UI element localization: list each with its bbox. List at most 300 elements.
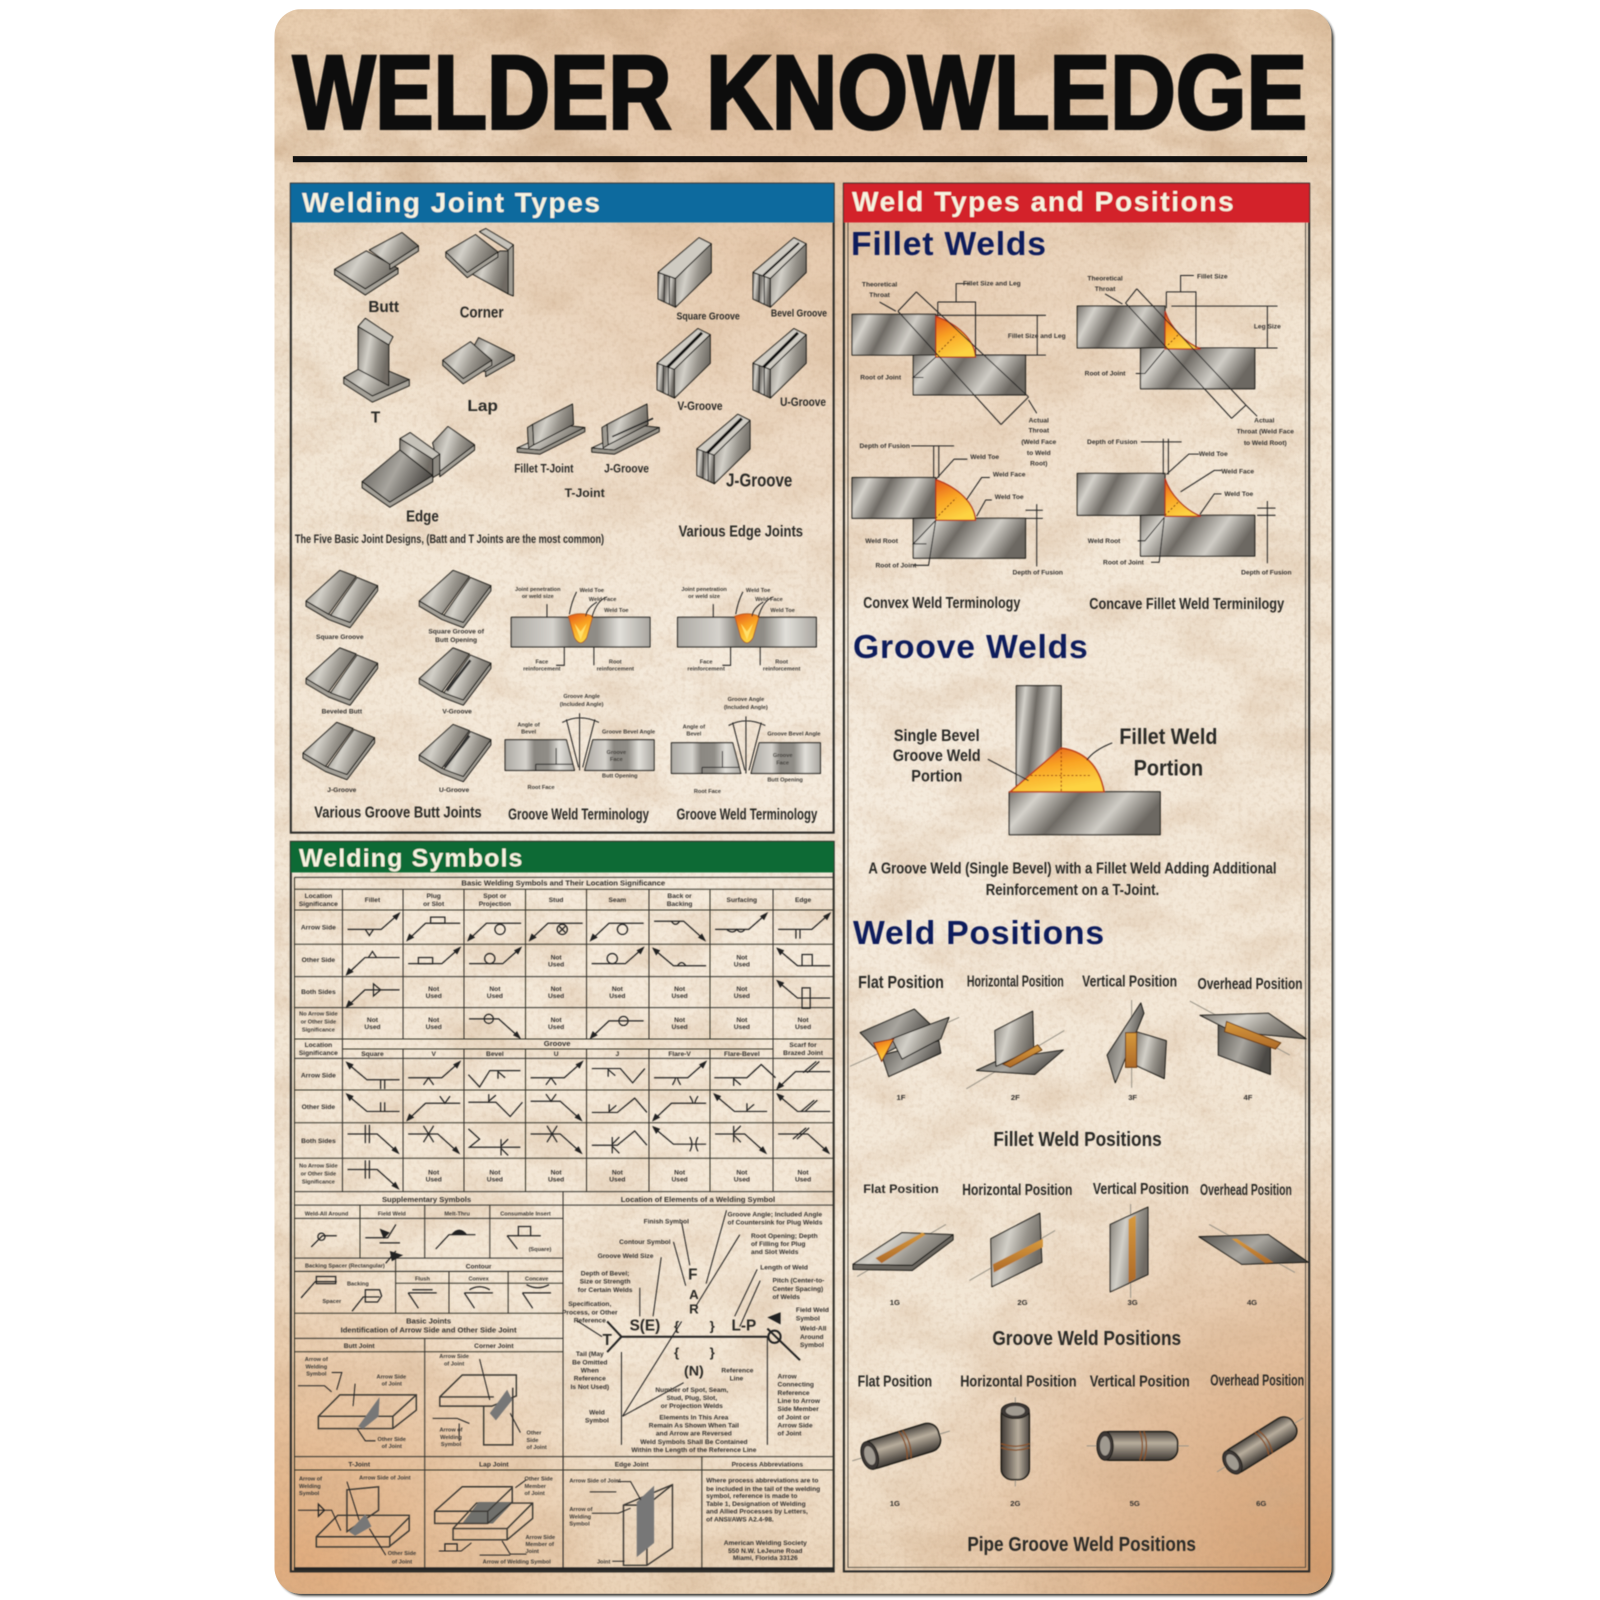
symbol elements: } (710, 1319, 715, 1334)
diagram: concave terminology: Depth of Fusion (1087, 439, 1137, 446)
symbols: no arrow side row: Not (551, 1017, 562, 1024)
icon: bevel groove edge joint: Bevel Groove (771, 308, 827, 319)
symbols: groove no arrow side row: Not (674, 1170, 686, 1177)
icon: 6G pipe overhead: 6G (1256, 1499, 1266, 1508)
icon: j-groove butt (303, 722, 374, 794)
text block: groove weld note (868, 860, 1277, 899)
text block: groove weld note: A Groove Weld (Single Bevel) with a Fillet Weld Adding Additional (868, 860, 1277, 877)
diagram: groove weld terminology left: or weld size (522, 594, 554, 600)
symbols: both sides row (346, 980, 830, 1008)
fillet position labels: Flat Position (858, 972, 944, 992)
table: supplementary symbols: Concave (525, 1277, 548, 1283)
symbols: both sides row: Not (674, 986, 686, 993)
diagram: groove weld terminology right: Joint penetration (681, 587, 727, 593)
diagram: concave fillet throat: to Weld Root) (1244, 440, 1287, 447)
symbol: consumable insert: (Square) (529, 1247, 551, 1253)
symbols: groove no arrow side row: Used (609, 1177, 625, 1184)
element labels: for Certain Welds (578, 1287, 633, 1294)
diagram: concave terminology: Root of Joint (1103, 559, 1145, 566)
icon: 3G groove vertical: 3G (1128, 1298, 1138, 1307)
diagram: butt joint identification: Other Side (378, 1437, 406, 1443)
icon: 3F fillet vertical: 3F (1128, 1093, 1137, 1102)
icon: j-groove butt: J-Groove (327, 787, 357, 794)
label: fillet weld portion: Portion (1134, 756, 1203, 781)
diagram: t-joint identification: Symbol (299, 1491, 320, 1497)
symbols: both sides row: Used (734, 993, 750, 1000)
icon: j-groove edge joint (697, 414, 792, 491)
icon: edge joint (362, 427, 474, 525)
table: location of elements of a welding symbol: Location of Elements of a Welding Symbol (621, 1195, 775, 1204)
diagram: t-joint identification: Other Side (388, 1551, 416, 1557)
icon: 2G groove horizontal: 2G (1017, 1298, 1028, 1307)
element labels: Remain As Shown When Tail (649, 1423, 739, 1430)
symbols: groove no arrow side row: Used (671, 1177, 688, 1184)
diagram: corner joint identification: of Joint (527, 1445, 547, 1451)
diagram: groove angle terminology right: Groove Angle (728, 697, 764, 703)
table: basic welding symbols: Back or (667, 893, 692, 900)
icon: t joint: T (371, 409, 381, 426)
icon: 1F fillet flat (850, 1009, 959, 1102)
panel: welding symbols (291, 842, 834, 1571)
label: fillet weld portion: Fillet Weld (1119, 724, 1217, 749)
element labels: Length of Weld (760, 1264, 808, 1271)
element labels: Weld (589, 1409, 605, 1416)
element labels: and Arrow are Reversed (656, 1431, 732, 1438)
leader lines (577, 1210, 760, 1416)
table: basic welding symbols: Other Side (302, 957, 335, 964)
diagram: convex fillet throat: Root of Joint (860, 375, 902, 382)
icon: 4F fillet overhead (1190, 1001, 1306, 1102)
diagram: groove angle terminology left (505, 694, 655, 791)
diagram: groove weld terminology left: Root (609, 659, 622, 665)
header labels: lower joints: T-Joint (348, 1461, 371, 1468)
symbols: no arrow side row: Not (428, 1017, 440, 1024)
element labels: Be Omitted (572, 1359, 607, 1366)
element labels: Contour Symbol (619, 1239, 671, 1246)
element labels: Center Spacing) (772, 1286, 823, 1293)
header: welding joint types: Welding Joint Types (302, 187, 600, 218)
diagram: concave terminology: Depth of Fusion (1241, 569, 1292, 576)
element labels: Symbol (800, 1342, 824, 1349)
diagram: groove weld terminology right: reinforcement (763, 666, 800, 672)
symbols: groove no arrow side row: Used (795, 1177, 811, 1184)
diagram: convex fillet throat: to Weld (1027, 450, 1051, 457)
table: supplementary symbols: Field Weld (378, 1211, 406, 1217)
table: supplementary symbols: Convex (468, 1277, 490, 1283)
symbols: both sides row: Used (671, 993, 688, 1000)
symbol elements: R (689, 1301, 699, 1316)
caption: groove weld terminology right: Groove Weld Terminology (677, 806, 818, 823)
diagram: groove weld terminology right: Weld Toe (770, 608, 795, 614)
symbol: backing and spacer: Backing (347, 1282, 369, 1288)
symbols: groove no arrow side row: Not (489, 1170, 501, 1177)
symbols: both sides row: Used (609, 993, 625, 1000)
symbols: groove both sides row (348, 1125, 830, 1155)
panel: welding joint types (291, 184, 834, 833)
symbols: no arrow side row: Not (736, 1017, 748, 1024)
symbols: groove no arrow side row: Not (551, 1170, 562, 1177)
symbols: both sides row: Used (487, 993, 503, 1000)
diagram: groove angle terminology left: Face (610, 757, 623, 763)
table: basic welding symbols: Backing (667, 901, 692, 908)
symbols: no arrow side row: Not (798, 1017, 809, 1024)
element labels: or Projection Welds (661, 1403, 723, 1410)
pipe position labels (858, 1373, 1304, 1391)
element labels: Specification, (568, 1301, 611, 1308)
icon: beveled butt: Beveled Butt (322, 708, 363, 715)
bottom rule (294, 1567, 834, 1570)
symbol: backing and spacer (301, 1277, 382, 1311)
table: supplementary symbols: Corner Joint (474, 1343, 514, 1350)
diagram: groove angle terminology left: Root Face (528, 785, 555, 791)
element labels: Pitch (Center-to- (772, 1278, 824, 1285)
element labels: and Slot Welds (751, 1249, 799, 1256)
symbols: groove no arrow side row: Not (428, 1170, 440, 1177)
symbol: contour convex (464, 1287, 493, 1308)
fillet position labels: Vertical Position (1082, 974, 1177, 991)
header: welding joint types (291, 184, 834, 222)
element labels: Reference (721, 1367, 754, 1374)
element labels: of Welds (772, 1294, 800, 1301)
panel: weld types and positions (844, 184, 1310, 1571)
text block: process abbreviations: American Welding Society (724, 1540, 807, 1547)
diagram: corner joint identification: Other (527, 1431, 542, 1437)
aged metal board background (274, 9, 1332, 1594)
text block: process abbreviations (706, 1478, 820, 1562)
diagram: corner joint identification: of Joint (444, 1361, 464, 1367)
diagram: edge joint identification: Symbol (569, 1522, 590, 1528)
element labels: Weld-All (800, 1326, 827, 1333)
diagram: butt joint identification: Arrow Side (377, 1375, 406, 1381)
symbols: both sides row: Used (426, 993, 442, 1000)
symbols: no arrow side row: Used (734, 1024, 750, 1031)
icon: 3F fillet vertical (1107, 1000, 1166, 1102)
symbol: contour flush (408, 1290, 437, 1308)
icon: 6G pipe overhead (1210, 1407, 1310, 1508)
diagram: groove angle terminology left: Groove Bevel Angle (602, 730, 655, 736)
symbols: no arrow side row: Not (367, 1017, 379, 1024)
text block: process abbreviations: 550 N.W. LeJeune Road (728, 1548, 802, 1555)
symbol: contour concave (522, 1285, 551, 1308)
diagram: concave fillet throat (1077, 274, 1294, 447)
icon: 2G pipe horizontal: 2G (1010, 1499, 1020, 1508)
text block: process abbreviations: and Allied Processes by Letters, (706, 1508, 808, 1515)
diagram: concave fillet throat: Leg Size (1254, 324, 1281, 331)
element labels: Size or Strength (580, 1279, 631, 1286)
element labels: Root Opening; Depth (751, 1233, 818, 1240)
diagram: butt joint identification: of Joint (382, 1382, 402, 1388)
diagram: concave terminology: Weld Face (1221, 468, 1254, 475)
table: basic welding symbols: or Slot (423, 901, 445, 908)
icon: u-groove butt (419, 724, 491, 794)
diagram: concave fillet throat: Actual (1254, 417, 1275, 424)
symbols: other side row: Used (548, 962, 564, 969)
table: basic welding symbols: Square (361, 1051, 384, 1058)
header: welding symbols: Welding Symbols (299, 844, 522, 872)
table: basic welding symbols: Projection (479, 901, 511, 908)
symbols: both sides row: Not (428, 986, 440, 993)
symbols: groove no arrow side row: Not (612, 1170, 624, 1177)
header: welding symbols (291, 842, 834, 872)
diagram: concave fillet throat: Fillet Size (1197, 274, 1228, 281)
diagram: t-joint identification (298, 1476, 416, 1565)
symbol: consumable insert (507, 1227, 551, 1253)
label: t-joint: T-Joint (565, 486, 605, 500)
table: basic welding symbols: Stud (549, 897, 563, 904)
symbol elements: T (602, 1332, 612, 1349)
table: basic welding symbols: Edge (795, 897, 811, 904)
table: supplementary symbols: Weld-All Around (305, 1211, 349, 1217)
symbols: groove no arrow side row (348, 1160, 811, 1190)
element labels: Process, or Other (562, 1309, 618, 1316)
diagram: groove weld terminology right: reinforcement (687, 666, 725, 672)
heading: fillet welds: Fillet Welds (851, 226, 1046, 263)
diagram: groove angle terminology right: Angle of (683, 725, 705, 731)
caption: various groove butt joints: Various Groove Butt Joints (314, 804, 482, 821)
diagram: lap joint identification: of Joint (524, 1491, 545, 1497)
diagram: convex terminology (852, 443, 1063, 576)
table: supplementary symbols: Identification of Arrow Side and Other Side Joint (341, 1326, 517, 1335)
board shadow (278, 12, 1334, 1596)
element labels: Arrow (778, 1374, 798, 1381)
diagram: t-joint identification: of Joint (392, 1559, 412, 1565)
diagram: corner joint identification: Welding (440, 1435, 462, 1441)
diagram: groove weld terminology right: Weld Face (755, 597, 783, 603)
element labels: of Countersink for Plug Welds (728, 1219, 823, 1226)
diagram: convex terminology: Root of Joint (875, 562, 917, 569)
diagram: t-joint identification: Arrow of (299, 1477, 322, 1483)
table: basic welding symbols: U (554, 1051, 559, 1058)
symbols: no arrow side row: Used (671, 1024, 688, 1031)
fillet position labels (858, 972, 1303, 993)
icon: 2G pipe horizontal (1001, 1397, 1029, 1508)
symbols: other side row: Not (551, 955, 562, 962)
diagram: groove angle terminology right: Butt Opening (767, 778, 803, 784)
table: basic welding symbols: Plug (426, 893, 441, 900)
text block: process abbreviations: symbol, reference is made to (706, 1493, 797, 1500)
table: basic welding symbols: Arrow Side (301, 925, 336, 932)
diagram: lap joint identification: Joint (526, 1549, 539, 1555)
symbols: groove no arrow side row: Used (426, 1177, 442, 1184)
diagram: edge joint identification: Joint (597, 1559, 610, 1565)
groove position labels: Vertical Position (1093, 1181, 1189, 1198)
diagram: butt joint identification (298, 1357, 416, 1450)
title rule (293, 156, 1307, 162)
diagram: corner joint identification: Side (527, 1438, 538, 1444)
element labels: Reference (778, 1390, 810, 1397)
table: supplementary symbols: Melt-Thru (444, 1211, 470, 1217)
diagram: groove angle terminology right: Bevel (686, 732, 702, 738)
table: basic welding symbols: Significance (302, 1028, 335, 1034)
icon: corner joint (446, 229, 513, 321)
icon: 3G groove vertical (1110, 1204, 1148, 1307)
table: basic welding symbols: Spot or (483, 893, 507, 900)
element labels: Field Weld (796, 1307, 829, 1314)
caption: convex weld terminology: Convex Weld Terminology (863, 595, 1021, 612)
table: basic welding symbols: No Arrow Side (299, 1163, 338, 1169)
icon: corner joint: Corner (460, 304, 504, 321)
icon: t-joint j-groove (592, 404, 659, 475)
symbol elements: F (688, 1267, 698, 1284)
label: single bevel groove weld portion: Single Bevel (894, 727, 980, 745)
text block: process abbreviations: Table 1, Designation of Welding (706, 1501, 806, 1508)
table: basic welding symbols: Both Sides (301, 1138, 336, 1145)
icon: j-groove edge joint: J-Groove (726, 470, 792, 491)
label: single bevel groove weld portion: Portion (911, 768, 962, 786)
diagram: groove angle terminology right: Root Face (694, 789, 721, 795)
icon: 4G groove overhead (1199, 1224, 1308, 1307)
icon: t joint (344, 318, 409, 426)
diagram: convex fillet throat: Theoretical (862, 282, 897, 289)
symbols: groove no arrow side row: Used (548, 1177, 564, 1184)
table: basic welding symbols: Bevel (486, 1051, 504, 1058)
diagram: groove weld terminology left: Face (535, 659, 548, 665)
icon: square groove of butt opening (419, 570, 491, 644)
element labels: Symbol (796, 1315, 820, 1322)
symbol: field weld (365, 1224, 403, 1263)
diagram: convex terminology: Weld Root (865, 538, 899, 545)
element labels: Line to Arrow (778, 1398, 821, 1405)
diagram: convex terminology: Weld Toe (970, 454, 999, 461)
table: location of elements of a welding symbol (562, 1192, 833, 1568)
diagram: groove weld terminology left: Weld Toe (604, 608, 629, 614)
symbols: other side row: Used (734, 962, 750, 969)
reference line and tail (607, 1312, 800, 1445)
diagram: concave terminology: Weld Root (1088, 538, 1121, 545)
icon: t-joint fillet: Fillet T-Joint (514, 461, 573, 475)
diagram: convex fillet throat: Fillet Size and Leg (963, 281, 1021, 288)
diagram: edge joint identification: Arrow Side of Joint (569, 1479, 621, 1485)
icon: t-joint j-groove: J-Groove (604, 461, 649, 475)
symbols: no arrow side row: Used (795, 1024, 811, 1031)
element labels: Groove Weld Size (598, 1253, 654, 1260)
text block: process abbreviations: Miami, Florida 33126 (733, 1555, 798, 1562)
diagram: butt joint identification: Symbol (306, 1372, 327, 1378)
element labels: Connecting (778, 1382, 814, 1389)
diagram: convex fillet throat: Throat (1028, 428, 1050, 435)
symbol elements: } (710, 1345, 715, 1360)
element labels: Arrow Side (778, 1423, 813, 1430)
icon: 1G groove flat: 1G (890, 1298, 900, 1307)
element labels: of Joint (778, 1431, 802, 1438)
table: basic welding symbols: Significance (299, 901, 338, 908)
icon: square groove of butt opening: Butt Opening (435, 637, 477, 644)
symbols: no arrow side row: Not (674, 1017, 686, 1024)
groove position labels: Overhead Position (1200, 1182, 1292, 1199)
groove position labels: Horizontal Position (962, 1182, 1072, 1199)
icon: square groove of butt opening: Square Groove of (428, 629, 485, 636)
table: basic welding symbols: Basic Welding Symbols and Their Location Significance (461, 879, 665, 888)
table: basic welding symbols (294, 877, 833, 1192)
table: basic welding symbols: Location (305, 893, 332, 900)
diagram: concave terminology: Weld Toe (1199, 451, 1228, 458)
element labels: Line (730, 1376, 744, 1383)
diagram: concave fillet throat: Theoretical (1087, 276, 1123, 283)
caption: pipe groove weld positions: Pipe Groove Weld Positions (967, 1534, 1196, 1556)
icon: u-groove edge joint: U-Groove (780, 395, 826, 409)
groove position labels (863, 1181, 1292, 1199)
diagram: concave fillet throat: Throat (Weld Face (1237, 429, 1294, 436)
table: basic welding symbols: J (616, 1051, 620, 1058)
caption: five basic joint designs: The Five Basic Joint Designs, (Batt and T Joints are the most common) (295, 532, 604, 546)
symbol elements: L-P (732, 1318, 756, 1335)
element labels: Reference (574, 1376, 606, 1383)
symbols: both sides row: Used (548, 993, 564, 1000)
symbols: both sides row: Not (612, 986, 624, 993)
table: basic welding symbols: Groove (544, 1039, 571, 1048)
diagram: edge joint identification: Arrow of (569, 1507, 593, 1513)
poster: welder knowledge metal sign (274, 9, 1336, 1598)
caption: fillet weld positions: Fillet Weld Positions (993, 1129, 1162, 1151)
element labels: Number of Spot, Seam, (655, 1387, 728, 1394)
heading: groove welds: Groove Welds (853, 629, 1088, 666)
diagram: groove angle terminology left: Butt Opening (602, 774, 638, 780)
symbol: weld all around (311, 1233, 337, 1247)
element labels: Is Not Used) (570, 1384, 609, 1391)
diagram: groove weld terminology right: or weld size (688, 594, 720, 600)
diagram: concave terminology: Weld Toe (1224, 491, 1254, 498)
diagram: corner joint identification: Arrow Side (439, 1354, 469, 1360)
table: supplementary symbols: Contour (466, 1263, 492, 1270)
icon: square groove butt (306, 570, 378, 641)
element labels: Reference (574, 1317, 606, 1324)
element labels: of Filling for Plug (751, 1241, 805, 1248)
element labels: Symbol (585, 1417, 609, 1424)
element labels: Elements In This Area (659, 1414, 729, 1421)
icon: 2F fillet horizontal (966, 1011, 1064, 1102)
diagram: lap joint identification: Arrow of Welding Symbol (483, 1559, 551, 1565)
header labels: lower joints (348, 1461, 803, 1468)
icon: u-groove edge joint (753, 329, 826, 409)
icon: v-groove edge joint (657, 329, 723, 413)
diagram: convex fillet throat: (Weld Face (1021, 439, 1057, 446)
diagram: concave fillet throat: Root of Joint (1085, 371, 1126, 378)
diagram: butt joint identification: Arrow of (305, 1357, 328, 1363)
diagram: butt joint identification: Welding (305, 1364, 328, 1370)
element labels: Side Member (778, 1406, 819, 1413)
icon: square groove edge joint: Square Groove (677, 311, 740, 322)
diagram: lap joint identification: Member of (526, 1542, 554, 1548)
diagram: convex terminology: Weld Toe (995, 494, 1024, 501)
table: basic welding symbols: or Other Side (301, 1019, 336, 1025)
diagram: convex fillet throat: Root) (1030, 460, 1047, 467)
fillet position labels: Horizontal Position (967, 974, 1064, 991)
header: weld types and positions: Weld Types and Positions (852, 186, 1234, 217)
caption: groove weld terminology left: Groove Weld Terminology (508, 806, 649, 823)
symbols: other side row (346, 946, 830, 976)
table: basic welding symbols: or Other Side (301, 1172, 336, 1178)
table: basic welding symbols: Flare-Bevel (724, 1051, 760, 1058)
element labels: Stud, Plug, Slot, (666, 1395, 717, 1402)
diagram: groove angle terminology right: Groove Bevel Angle (767, 732, 820, 738)
icon: butt joint (335, 233, 418, 316)
icon: lap joint (443, 338, 514, 415)
icon: 1G pipe flat (848, 1417, 954, 1508)
table: basic welding symbols: Scarf for (789, 1042, 817, 1049)
header labels: lower joints: Process Abbreviations (732, 1461, 803, 1468)
diagram: groove weld terminology right: Face (700, 659, 713, 665)
element labels: Around (800, 1334, 824, 1341)
icon: beveled butt (306, 648, 378, 715)
table: basic welding symbols: Flare-V (668, 1051, 691, 1058)
table: supplementary symbols: Flush (415, 1277, 430, 1283)
diagram: t-joint identification: Arrow Side of Joint (359, 1476, 411, 1482)
table: basic welding symbols: Location (305, 1042, 332, 1049)
diagram: corner joint identification (433, 1354, 547, 1451)
diagram: groove angle terminology right: Groove (773, 753, 792, 759)
diagram: edge joint identification: Welding (569, 1514, 592, 1520)
diagram: corner joint identification: Arrow of (439, 1428, 463, 1434)
